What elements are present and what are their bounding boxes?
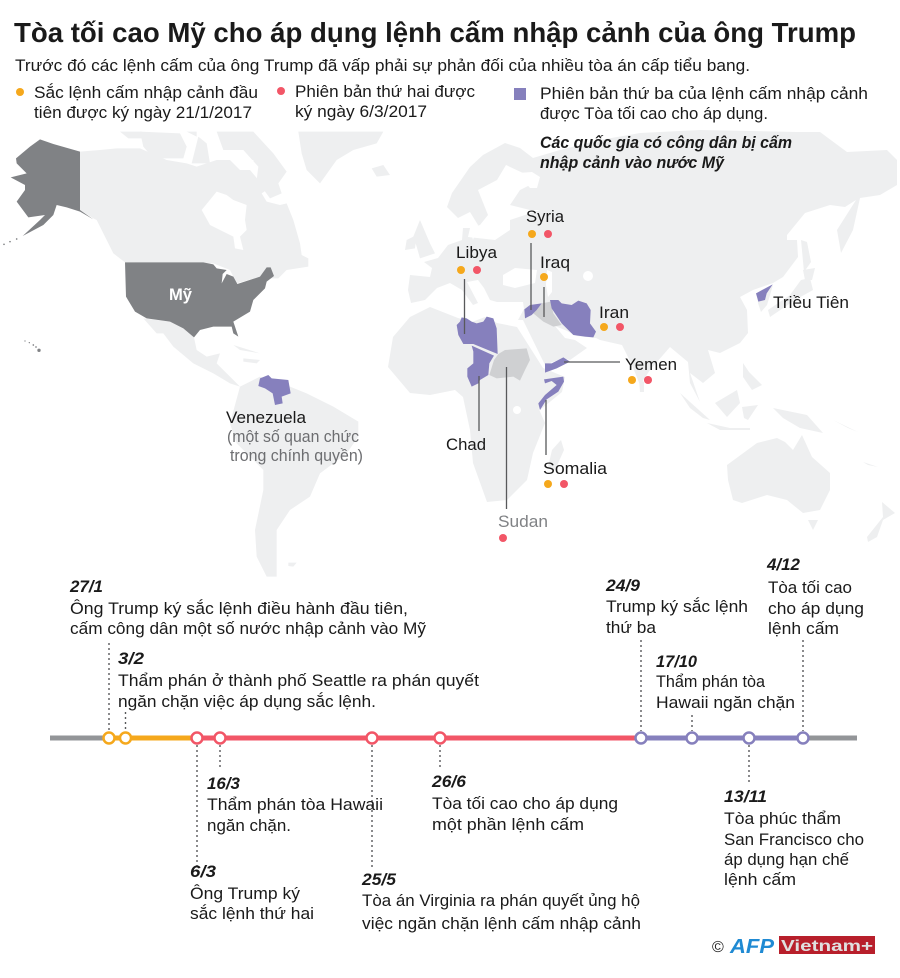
- label: Mỹ: Mỹ: [169, 286, 193, 304]
- event: 25/5: việc ngăn chặn lệnh cấm nhập cảnh: [362, 915, 641, 933]
- country: Iran: [550, 300, 596, 337]
- credit logos: ©: [712, 939, 724, 956]
- label: Iran: [599, 304, 629, 331]
- label: Libya: Libya: [456, 244, 498, 262]
- label: Venezuela: trong chính quyền): [230, 447, 363, 465]
- Venezuela and banned countries: [258, 284, 773, 410]
- event: 16/3: 16/3: [207, 775, 240, 793]
- label: Chad: [446, 376, 486, 454]
- label: Somalia: [543, 400, 608, 488]
- event: 16/3: [207, 775, 383, 835]
- credit logos: Vietnam+: [781, 938, 873, 955]
- timeline: [50, 640, 857, 872]
- label: Iraq: Iraq: [540, 254, 570, 272]
- legend: third version: [514, 85, 868, 123]
- event: 6/3: sắc lệnh thứ hai: [190, 904, 314, 923]
- label: Libya: [456, 244, 498, 334]
- event: 26/6: [431, 773, 618, 834]
- event: 4/12: lệnh cấm: [768, 620, 839, 638]
- label: Iran: Iran: [599, 304, 629, 322]
- country: Chad: [467, 346, 494, 387]
- legend: second version: ký ngày 6/3/2017: [295, 103, 427, 121]
- label: Iraq: [540, 254, 570, 317]
- event: 6/3: [190, 863, 314, 923]
- event: 24/9: [605, 577, 748, 637]
- event: 26/6: một phần lệnh cấm: [432, 816, 584, 834]
- event: 6/3: Ông Trump ký: [190, 884, 301, 903]
- country: Libya: [457, 317, 498, 354]
- event: 25/5: Tòa án Virginia ra phán quyết ủng hộ: [362, 892, 640, 910]
- label: Syria: Syria: [526, 208, 565, 226]
- event: 3/2: [118, 650, 479, 711]
- Americas and Greenland: [80, 132, 435, 577]
- legend: second version: [277, 83, 475, 121]
- event: 13/11: San Francisco cho: [724, 831, 864, 849]
- label: Venezuela: [226, 409, 363, 465]
- country: Syria: [524, 303, 542, 318]
- event: 13/11: Tòa phúc thẩm: [724, 810, 841, 828]
- event: 27/1: cấm công dân một số nước nhập cảnh vào Mỹ: [70, 620, 427, 638]
- event: 26/6: Tòa tối cao cho áp dụng: [432, 795, 618, 813]
- event: 24/9: Trump ký sắc lệnh: [606, 597, 748, 616]
- event: 3/2: ngăn chặn việc áp dụng sắc lệnh.: [118, 692, 376, 711]
- Eurasia, Africa, Oceania: [388, 130, 897, 542]
- world map: [3, 130, 897, 577]
- event: 27/1: 27/1: [69, 578, 103, 596]
- event: 26/6: 26/6: [431, 773, 467, 791]
- event: 4/12: cho áp dụng: [768, 600, 864, 618]
- country: Iraq: [533, 302, 562, 327]
- legend: third version: Phiên bản thứ ba của lệnh cấm nhập cảnh: [540, 85, 868, 103]
- label: Chad: Chad: [446, 436, 486, 454]
- map heading: nhập cảnh vào nước Mỹ: [540, 154, 725, 172]
- event: 4/12: Tòa tối cao: [768, 579, 852, 597]
- event: 24/9: 24/9: [605, 577, 641, 595]
- event: 13/11: lệnh cấm: [724, 871, 796, 889]
- event: 13/11: 13/11: [724, 788, 767, 806]
- United States: [3, 139, 274, 352]
- event: 3/2: 3/2: [118, 650, 144, 668]
- legend: first order: Sắc lệnh cấm nhập cảnh đầu: [34, 83, 258, 102]
- label: Somalia: Somalia: [543, 460, 608, 478]
- label: Triều Tiên: Triều Tiên: [773, 294, 849, 312]
- event: 17/10: Hawaii ngăn chặn: [656, 694, 795, 712]
- label: Venezuela: Venezuela: [226, 409, 307, 427]
- title: Tòa tối cao Mỹ cho áp dụng lệnh cấm nhập cảnh của ông Trump: [14, 17, 856, 48]
- map heading: [540, 134, 792, 172]
- event: 17/10: 17/10: [656, 653, 698, 671]
- credit logos: [712, 936, 875, 958]
- event: 3/2: Thẩm phán ở thành phố Seattle ra phán quyết: [118, 672, 479, 690]
- country: Sudan: [489, 348, 530, 381]
- event: 27/1: [69, 578, 427, 638]
- event: 24/9: thứ ba: [606, 619, 657, 637]
- event: 25/5: [361, 871, 641, 933]
- label: Yemen: Yemen: [625, 356, 677, 374]
- subtitle: Trước đó các lệnh cấm của ông Trump đã vấp phải sự phản đối của nhiều tòa án cấp tiểu bang.: [15, 57, 750, 75]
- country: Yemen: [545, 357, 570, 373]
- country: North Korea: [756, 284, 773, 302]
- event: 13/11: [724, 788, 864, 889]
- label: Venezuela: (một số quan chức: [227, 428, 359, 446]
- legend: second version: Phiên bản thứ hai được: [295, 83, 475, 101]
- label: Yemen: [564, 356, 677, 384]
- label: Sudan: Sudan: [498, 513, 548, 531]
- event: 13/11: áp dụng hạn chế: [724, 851, 849, 869]
- label: Syria: [526, 208, 565, 310]
- event: 17/10: [656, 653, 795, 712]
- map heading: Các quốc gia có công dân bị cấm: [540, 134, 792, 152]
- credit logos: AFP: [729, 936, 775, 958]
- event: 6/3: 6/3: [190, 863, 216, 881]
- event: 25/5: 25/5: [361, 871, 397, 889]
- legend: first order: tiên được ký ngày 21/1/2017: [34, 104, 252, 122]
- country: Somalia: [538, 377, 564, 410]
- event: 16/3: Thẩm phán tòa Hawaii: [207, 796, 383, 814]
- event: 4/12: [766, 556, 864, 638]
- event: 16/3: ngăn chặn.: [207, 817, 291, 835]
- event: 4/12: 4/12: [766, 556, 800, 574]
- event: 17/10: Thẩm phán tòa: [656, 673, 766, 691]
- label: Sudan: [498, 367, 548, 542]
- legend: third version: được Tòa tối cao cho áp dụng.: [540, 105, 768, 123]
- legend: first order: [16, 83, 258, 122]
- event: 27/1: Ông Trump ký sắc lệnh điều hành đầu tiên,: [70, 599, 408, 618]
- country: Venezuela: [258, 375, 291, 405]
